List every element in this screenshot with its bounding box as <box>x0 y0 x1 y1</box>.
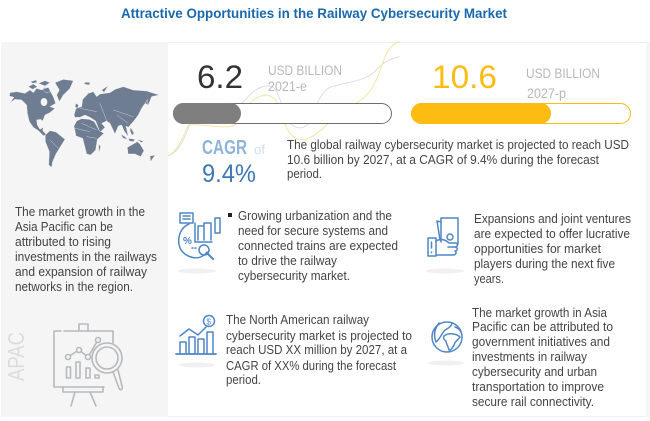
text: North American market: The North American railway <box>226 313 370 327</box>
icon: presentation board with magnifier <box>54 324 122 406</box>
background trend curves <box>168 42 400 156</box>
text: expansions and joint ventures: Expansions and joint ventures <box>474 212 631 226</box>
text: urbanization driver: cybersecurity market. <box>238 269 350 283</box>
text: North American market: CAGR of XX% during the forecast <box>226 359 396 373</box>
text: Asia Pacific government initiatives: The market growth in Asia <box>472 306 607 320</box>
text: Asia Pacific growth: and expansion of railway <box>15 265 148 279</box>
text: Asia Pacific growth: The market growth in the <box>15 205 145 219</box>
text: Asia Pacific growth: investments in the railways <box>15 250 157 264</box>
stat: 6.2 USD billion 2021-e: 6.2 <box>197 59 243 95</box>
stat: 6.2 USD billion 2021-e <box>197 59 342 95</box>
CAGR callout: CAGR <box>202 137 247 159</box>
text: expansions and joint ventures <box>474 212 631 286</box>
CAGR callout: 9.4% <box>202 160 256 188</box>
text: North American market: cybersecurity market is projected to <box>226 329 412 343</box>
text: market projection: The global railway cybersecurity market is projected to reach USD <box>287 138 629 152</box>
text: Asia Pacific growth: networks in the region. <box>15 280 133 294</box>
icon: analytics pie and magnifier <box>178 213 220 274</box>
text: market projection: 10.6 billion by 2027, at a CAGR of 9.4% during the forecast <box>287 153 599 167</box>
stat: 10.6 USD billion 2027-p: 10.6 <box>432 59 497 95</box>
icon: analytics pie and magnifier: % <box>183 236 192 247</box>
text: Asia Pacific growth <box>15 205 157 294</box>
text: expansions and joint ventures: are expected to offer lucrative <box>474 227 630 241</box>
text: North American market: reach USD XX million by 2027, at a <box>226 343 407 357</box>
text: Asia Pacific government initiatives: Pacific can be attributed to <box>472 320 613 334</box>
text: Asia Pacific government initiatives <box>472 306 613 409</box>
progress bar: 2021 <box>173 103 392 124</box>
text: urbanization driver <box>228 209 398 283</box>
text: Asia Pacific growth: Asia Pacific can be <box>15 220 113 234</box>
panel: APAC sidebar <box>1 42 168 417</box>
text: market projection <box>287 138 629 181</box>
text: Asia Pacific government initiatives: government initiatives and <box>472 335 610 349</box>
label: APAC: APAC <box>3 332 29 381</box>
text: Asia Pacific government initiatives: transportation to improve <box>472 380 604 394</box>
text: urbanization driver: Growing urbanization and the <box>238 209 392 223</box>
stat: 6.2 USD billion 2021-e: 2021-e <box>268 79 307 94</box>
stat: 10.6 USD billion 2027-p: USD BILLION <box>526 66 600 81</box>
text: Asia Pacific government initiatives: investments in railway <box>472 350 588 364</box>
text: Asia Pacific government initiatives: secure rail connectivity. <box>472 395 594 409</box>
stat: 10.6 USD billion 2027-p: 2027-p <box>527 86 566 101</box>
text: North American market: period. <box>226 373 261 387</box>
stat: 6.2 USD billion 2021-e: USD BILLION <box>268 63 342 78</box>
text: Asia Pacific government initiatives: cybersecurity and urban <box>472 365 597 379</box>
text: market projection: period. <box>287 167 322 181</box>
text: expansions and joint ventures: players during the next five <box>474 257 615 271</box>
CAGR callout: of <box>254 142 265 157</box>
stat: 10.6 USD billion 2027-p <box>432 59 600 101</box>
text: expansions and joint ventures: years. <box>474 272 504 286</box>
progress bar: 2027 <box>411 103 630 124</box>
icon: globe <box>428 322 464 366</box>
text: urbanization driver: need for secure systems and <box>238 224 388 238</box>
icon: hand holding money <box>426 218 464 274</box>
text: urbanization driver: connected trains are expected <box>238 239 398 253</box>
CAGR callout <box>202 137 265 188</box>
world map <box>9 79 159 167</box>
icon: growth chart with dollar coin: $ <box>206 318 212 326</box>
text: urbanization driver: to drive the railway <box>238 254 338 268</box>
icon: growth chart with dollar coin <box>176 316 216 368</box>
text: expansions and joint ventures: opportunities for market <box>474 242 602 256</box>
title: Attractive Opportunities in the Railway Cybersecurity Market <box>121 6 507 21</box>
text: North American market <box>226 313 412 387</box>
text: Asia Pacific growth: attributed to rising <box>15 235 111 249</box>
